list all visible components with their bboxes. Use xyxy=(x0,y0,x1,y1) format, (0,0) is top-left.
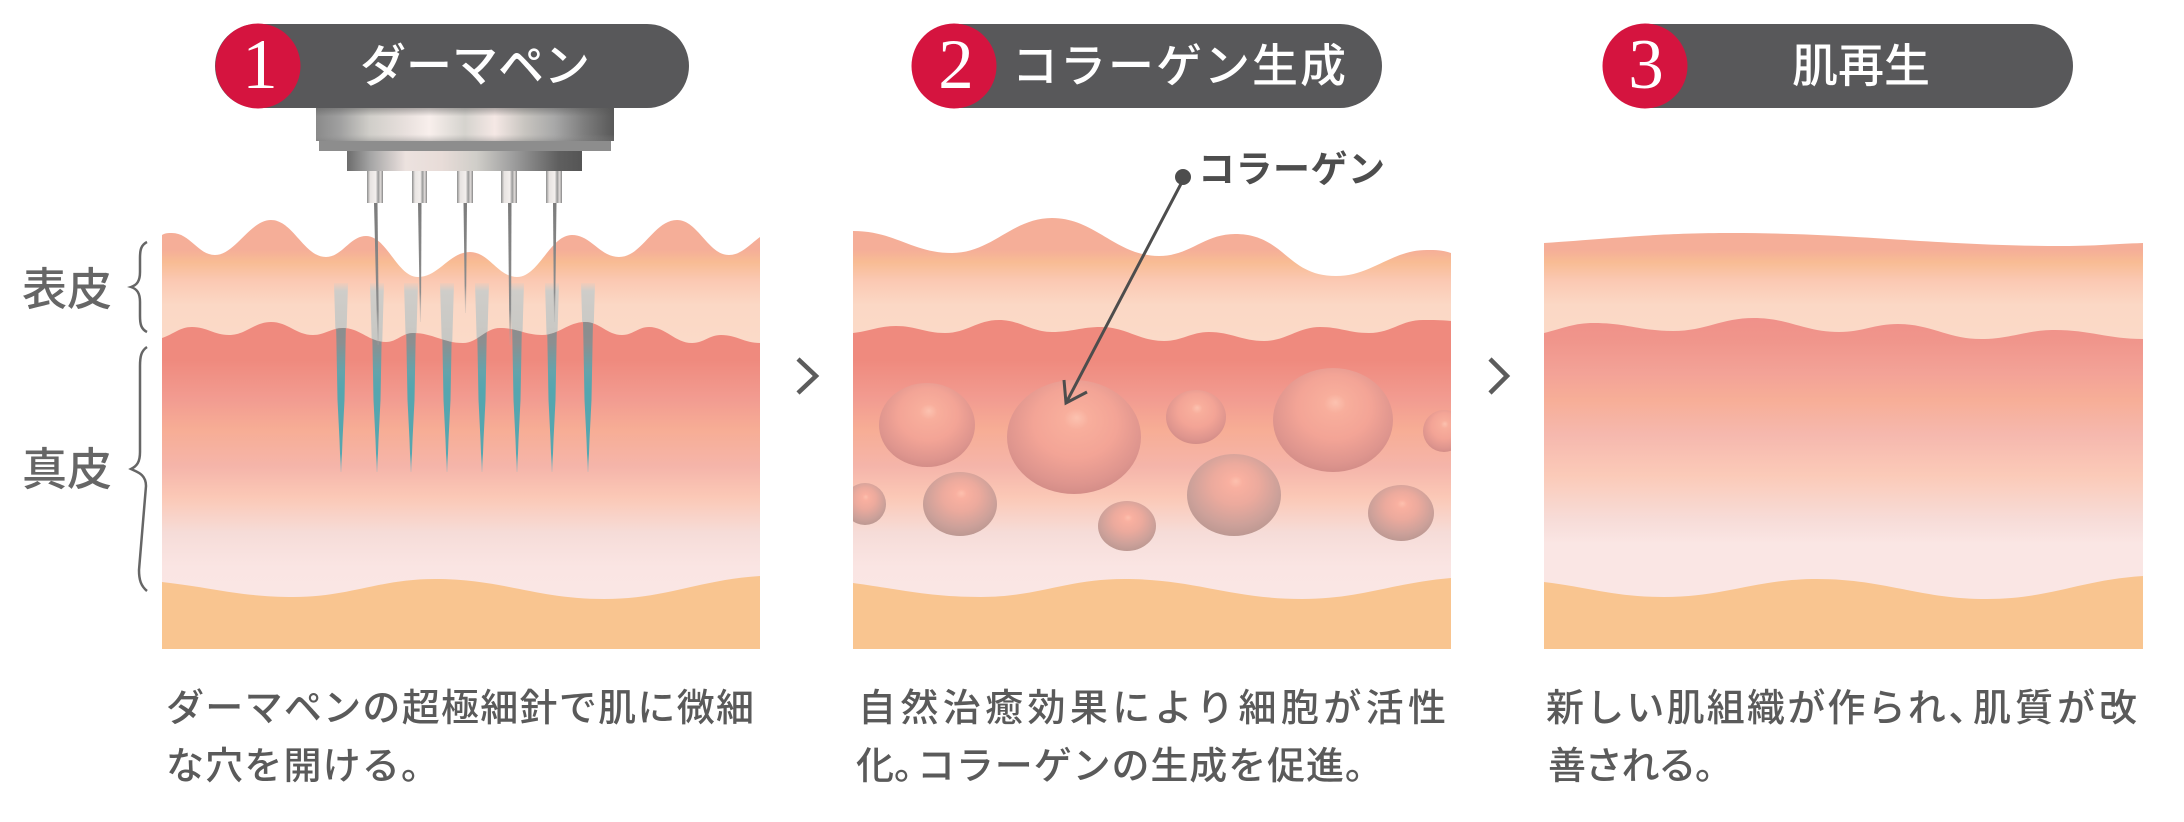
text: step 2 description: コラーゲンの生成を促進。 xyxy=(917,746,1384,788)
collagen bubbles xyxy=(844,368,1465,551)
skin layer: epidermis xyxy=(162,220,760,360)
callout: collagen arrow xyxy=(1064,149,1385,403)
heading: step 3: 3 xyxy=(1628,26,1664,104)
arrow: step 2 to step 3 xyxy=(1490,359,1507,393)
heading: step 1: ダーマペン xyxy=(360,40,590,92)
text: step 3 description: 新しい肌組織が作られ、 xyxy=(1546,688,1989,730)
heading: step 1: 1 xyxy=(242,26,278,104)
micro-channel traces in dermis xyxy=(336,320,593,472)
text: step 3 description: 善される。 xyxy=(1548,746,1733,788)
skin layer: subcutaneous fat xyxy=(1544,576,2143,649)
text: step 1 description: な穴を開ける。 xyxy=(166,746,439,788)
text: step 2 description xyxy=(856,688,1446,788)
brace: epidermis xyxy=(131,242,147,332)
heading: step 3 xyxy=(1602,24,2073,108)
brace: dermis xyxy=(131,347,147,591)
label: epidermis: 表皮 xyxy=(22,264,112,315)
skin layer: dermis xyxy=(162,322,760,649)
text: step 2 description: 自然治癒効果により細胞が活性 xyxy=(858,688,1446,730)
text: step 1 description xyxy=(166,688,754,788)
heading: step 2: コラーゲン生成 xyxy=(1012,40,1346,92)
needles xyxy=(374,203,556,345)
skin layer: dermis xyxy=(853,320,1451,649)
callout: collagen arrow: コラーゲン xyxy=(1198,149,1385,190)
heading: step 3: 肌再生 xyxy=(1792,40,1930,92)
micro-channel traces in epidermis xyxy=(334,283,595,350)
panel: step 3 skin regeneration xyxy=(1544,233,2143,649)
icon: dermapen needle head xyxy=(316,108,614,345)
skin layer: dermis xyxy=(1544,318,2143,649)
heading: step 2: 2 xyxy=(938,26,974,104)
skin layer: subcutaneous fat xyxy=(162,576,760,649)
text: step 3 description: 肌質が改 xyxy=(1973,688,2141,730)
needle holders xyxy=(367,171,562,203)
skin layer: subcutaneous fat xyxy=(853,578,1451,649)
heading: step 2 xyxy=(912,24,1382,108)
panel: step 1 dermapen xyxy=(162,220,760,649)
arrow: step 1 to step 2 xyxy=(798,359,816,393)
heading: step 1 xyxy=(215,24,689,108)
skin layer: epidermis xyxy=(1544,233,2143,360)
skin layer: epidermis xyxy=(853,218,1451,360)
panel: step 2 collagen generation xyxy=(844,218,1465,649)
text: step 3 description xyxy=(1546,688,2141,788)
label: dermis: 真皮 xyxy=(22,444,112,495)
text: step 2 description: 化。 xyxy=(856,746,932,788)
text: step 1 description: ダーマペンの超極細針で肌に微細 xyxy=(166,688,754,730)
device body xyxy=(316,108,614,141)
